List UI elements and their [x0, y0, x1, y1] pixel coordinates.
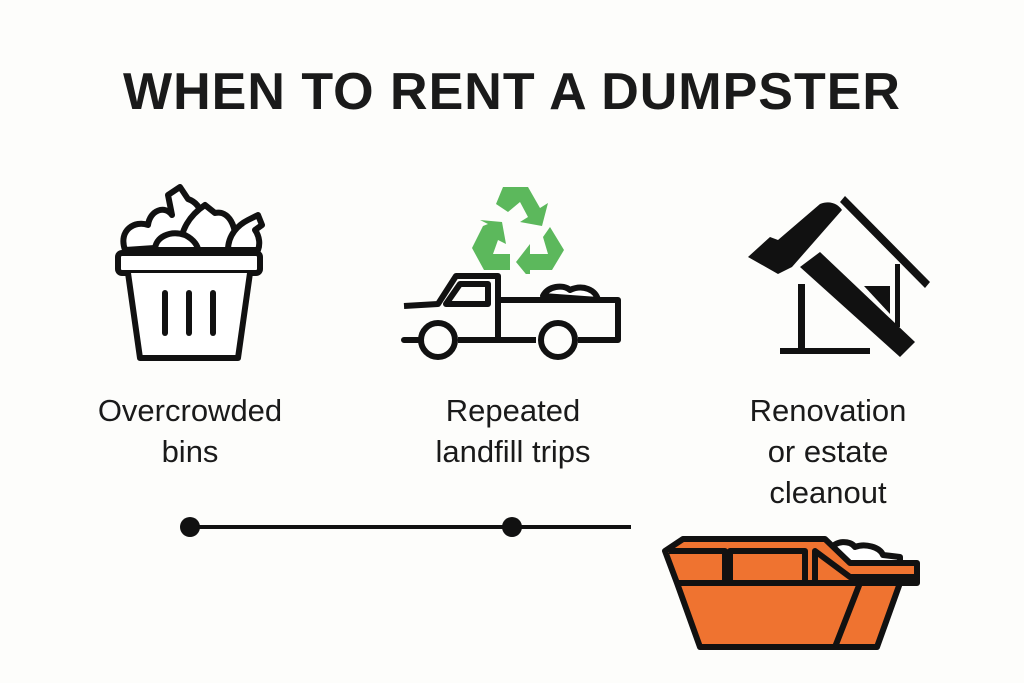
label: repeated landfill trips: Repeated [446, 393, 580, 428]
label: renovation or estate cleanout: or estate [768, 434, 888, 469]
label: overcrowded bins [98, 393, 282, 469]
label: repeated landfill trips: landfill trips [435, 434, 591, 469]
icon: pickup truck [401, 273, 621, 360]
title: WHEN TO RENT A DUMPSTER [123, 63, 901, 121]
icon: overcrowded trash bin [115, 184, 266, 361]
label: renovation or estate cleanout [750, 393, 906, 510]
label: renovation or estate cleanout: Renovation [750, 393, 906, 428]
label: overcrowded bins: bins [162, 434, 218, 469]
label: repeated landfill trips [435, 393, 591, 469]
label: overcrowded bins: Overcrowded [98, 393, 282, 428]
icon: hammer and house [748, 196, 930, 357]
icon: recycle symbol [472, 187, 564, 274]
icon: orange dumpster [662, 536, 920, 650]
label: renovation or estate cleanout: cleanout [769, 475, 887, 510]
timeline [180, 517, 631, 537]
